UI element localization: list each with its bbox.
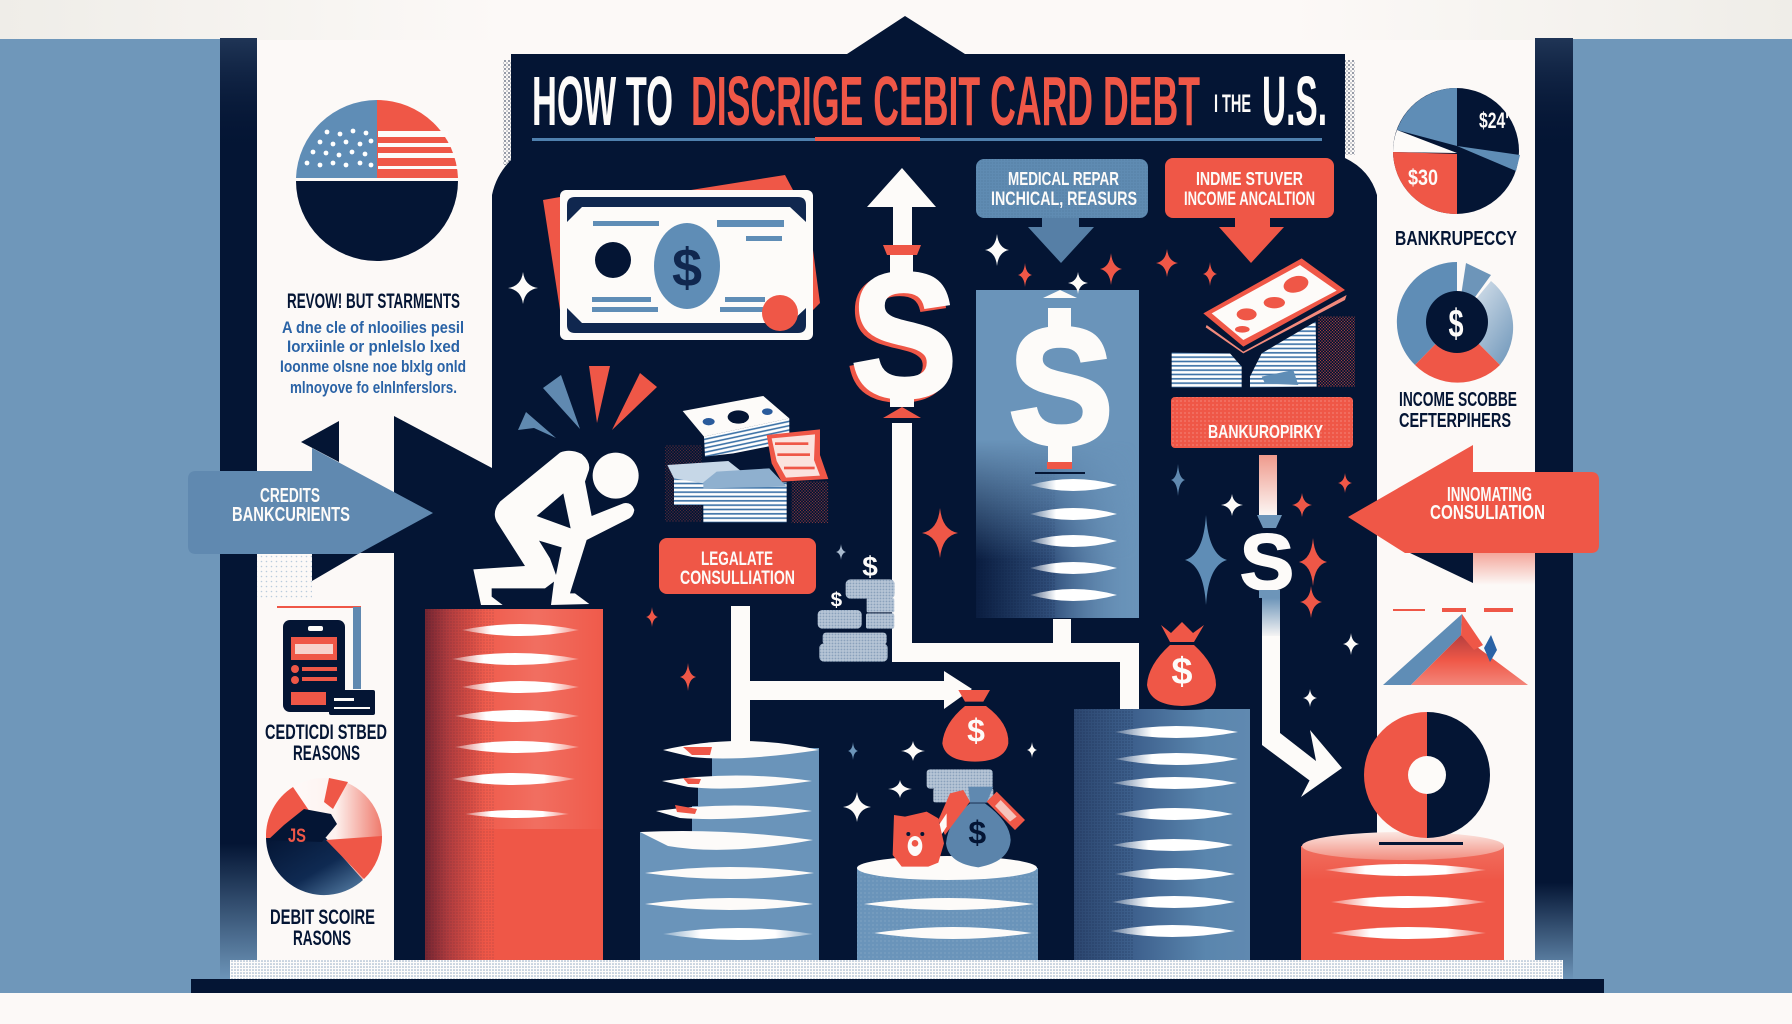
top band	[0, 0, 1792, 40]
icon: bags, coins and piggy bank	[893, 690, 1025, 867]
label box: bankruptcy	[1171, 397, 1353, 448]
label: bankruptcy: BANKRUPECCY	[1395, 228, 1518, 250]
label: debit score reasons: RASONS	[293, 927, 351, 950]
text block: revenue statements: A dne cle of nlooilies pesil	[282, 318, 464, 337]
icon: bags, coins and piggy bank: $	[967, 713, 985, 749]
chart: red cylinder	[1301, 832, 1504, 960]
icon: crouching person	[473, 451, 639, 605]
icon: tilted bill over money stacks	[1172, 258, 1355, 387]
chart: pie bankruptcy	[1393, 88, 1520, 214]
left lower navy triangle	[257, 533, 394, 598]
arrow callout: credits	[188, 448, 433, 554]
icon: upward arrow with dollar sign	[847, 168, 957, 437]
chart: pie debit score	[266, 778, 382, 895]
text block: revenue statements: Iorxiinle or pnlelslo lxed	[287, 337, 460, 356]
callout: legal consultation: CONSULLIATION	[680, 568, 795, 589]
arrow callout: credits: CREDITS	[260, 485, 320, 507]
title: HOW TO	[532, 62, 673, 140]
label: income score	[1399, 389, 1517, 432]
icon: upward arrow with dollar sign: S	[851, 238, 957, 434]
chart: pie bankruptcy: $24'	[1479, 108, 1509, 133]
icon: bags, coins and piggy bank: $	[968, 814, 986, 850]
text block: revenue statements: REVOW! BUT STARMENTS	[287, 290, 460, 313]
panel: right navy strip	[1535, 38, 1573, 980]
label: income score: INCOME SCOBBE	[1399, 389, 1517, 411]
callout: income: INCOME ANCALTION	[1184, 189, 1315, 210]
callout: medical reasons: INCHICAL, REASURS	[991, 189, 1137, 210]
chart: low blue column	[857, 856, 1038, 960]
icon: dollar bill card	[543, 175, 820, 340]
callout: income: INDME STUVER	[1196, 169, 1303, 189]
chart: red column	[425, 609, 603, 960]
arrow: right shaft with dollar and bent head: S	[1240, 517, 1294, 606]
icon: sparkles	[508, 234, 1359, 822]
right lower navy triangle	[1410, 553, 1535, 585]
icon: coin stacks: $	[862, 551, 878, 582]
title	[532, 62, 1327, 140]
icon: upward arrow with dollar sign: S	[847, 241, 953, 437]
label: debit score reasons	[270, 906, 375, 950]
icon: coin stacks	[818, 551, 895, 662]
icon: donut chart	[1364, 712, 1490, 838]
arrow callout: consultation	[1348, 445, 1599, 553]
icon: mountain chart	[1383, 608, 1528, 685]
chart: tall blue column with dollar sign: S	[1009, 295, 1113, 478]
base bar	[191, 979, 1604, 993]
text block: revenue statements: Ioonme olsne noe blxlg onld	[280, 357, 466, 376]
chart: dark blue column	[1074, 709, 1250, 960]
panel: left blue side	[0, 39, 221, 993]
panel: central navy board	[394, 16, 1377, 960]
panel: left navy strip	[220, 38, 257, 980]
chart: tall blue column with dollar sign	[976, 290, 1139, 618]
label: credit reasons	[265, 721, 387, 765]
chart: donut income score: $	[1448, 302, 1464, 346]
chart: donut income score	[1397, 262, 1513, 383]
text block: revenue statements: mlnoyove fo elnlnferslors.	[290, 378, 457, 397]
text block: revenue statements	[280, 290, 466, 397]
floor	[230, 960, 1563, 979]
arrow callout: consultation: CONSULIATION	[1430, 502, 1545, 524]
text: U.S.	[1262, 62, 1327, 140]
label box: bankruptcy: BANKUROPIRKY	[1208, 422, 1323, 442]
left mini navy triangle	[301, 421, 339, 462]
callout: legal consultation: LEGALATE	[701, 549, 773, 570]
icon: phone with card	[277, 606, 375, 715]
icon: coin stacks: $	[831, 589, 843, 612]
chart: stepped blue column	[640, 741, 819, 960]
title underline	[532, 137, 1322, 141]
arrow: central connector down and right	[892, 423, 1139, 715]
title: DISCRIGE CEBIT CARD DEBT	[691, 62, 1200, 140]
chart: pie bankruptcy: $30	[1408, 165, 1438, 190]
icon: US flag circle	[296, 100, 458, 261]
icon: money stacks with note	[665, 396, 828, 523]
callout: medical reasons	[976, 159, 1148, 263]
arrow callout: consultation: INNOMATING	[1447, 484, 1532, 506]
chart: pie debit score: JS	[288, 826, 306, 847]
icon: stressed burst rays	[518, 366, 657, 438]
title: I THE	[1214, 90, 1251, 118]
label: credit reasons: REASONS	[293, 742, 360, 765]
label: debit score reasons: DEBIT SCOIRE	[270, 906, 375, 929]
arrow: right shaft with dollar and bent head	[1240, 455, 1342, 797]
callout: legal consultation	[659, 538, 816, 594]
callout: medical reasons: MEDICAL REPAR	[1008, 169, 1119, 189]
label: income score: CEFTERPIHERS	[1399, 410, 1511, 432]
label: credit reasons: CEDTICDI STBED	[265, 721, 387, 744]
icon: money bag on dark column	[1147, 622, 1216, 710]
arrow callout: credits: BANKCURIENTS	[232, 504, 350, 526]
icon: money bag on dark column: $	[1171, 651, 1193, 693]
panel: right blue side	[1572, 39, 1792, 993]
callout: income	[1165, 158, 1334, 263]
icon: dollar bill card: $	[672, 238, 702, 298]
arrow: legal consultation to bag	[731, 606, 972, 742]
